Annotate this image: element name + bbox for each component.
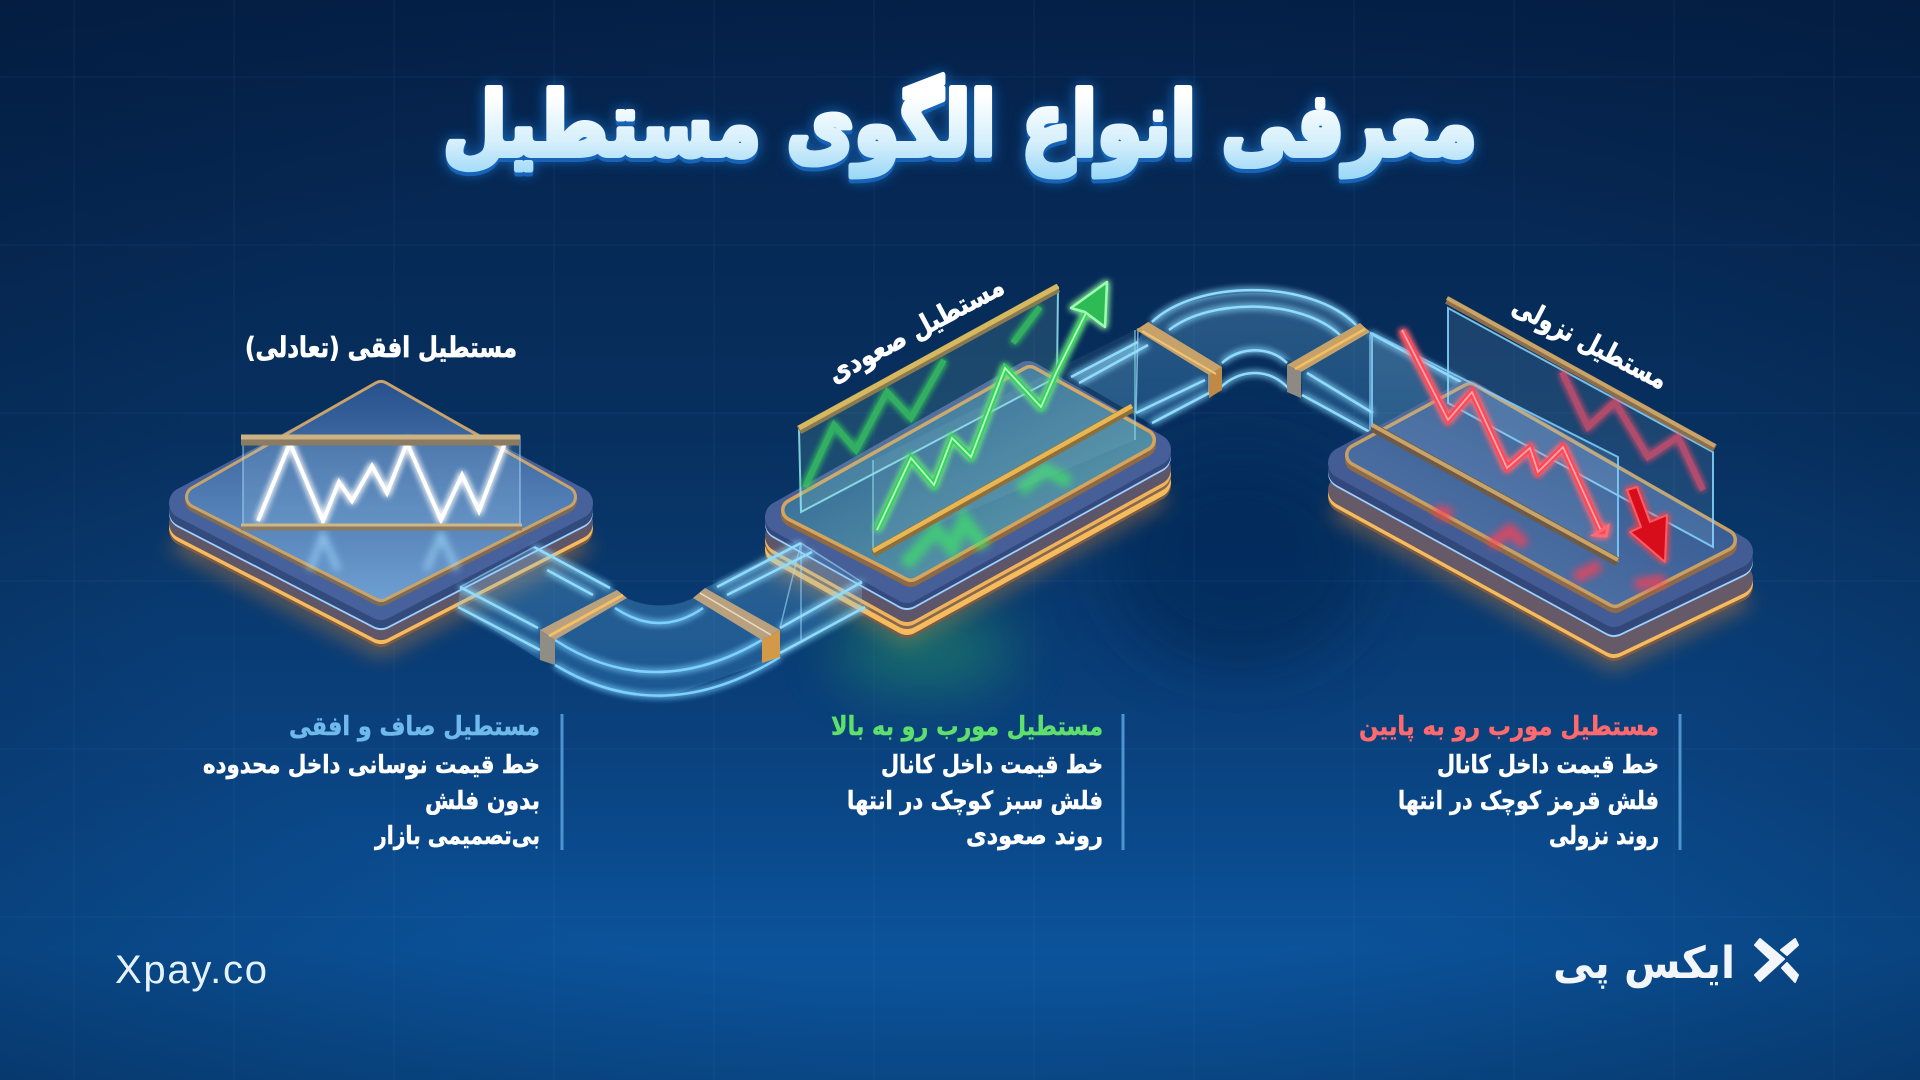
line 2: فلش سبز کوچک در انتها xyxy=(847,786,1103,816)
front support bar xyxy=(873,406,1132,553)
pipe: top arch between rising and falling platforms xyxy=(1071,290,1463,432)
reflection of chart on horizontal plate xyxy=(310,535,457,570)
platform: falling rectangle base xyxy=(1344,394,1737,645)
green rising price line with arrow xyxy=(877,282,1107,530)
reflection of green chart xyxy=(905,470,1070,565)
line 3: روند صعودی xyxy=(966,821,1103,851)
front glass xyxy=(873,330,1135,552)
line 2: فلش قرمز کوچک در انتها xyxy=(1398,786,1659,816)
platform: horizontal rectangle base xyxy=(185,392,577,631)
line 1: خط قیمت داخل کانال xyxy=(881,750,1103,779)
logo xyxy=(1553,938,1798,989)
text block: falling xyxy=(1359,712,1680,851)
connector collar 2 xyxy=(693,588,780,663)
bottom support bar xyxy=(241,525,522,527)
platform: rising rectangle base xyxy=(781,377,1155,622)
panel: horizontal glass with white chart xyxy=(241,436,522,528)
top resistance bar xyxy=(241,437,520,440)
line 3: روند نزولی xyxy=(1549,821,1659,851)
title: معرفی انواع الگوی مستطیل xyxy=(443,74,1477,178)
red arrow xyxy=(1627,487,1667,562)
panel: falling glass with red chart xyxy=(1372,298,1715,562)
front glass xyxy=(1372,333,1618,562)
line 3: بی‌تصمیمی بازار xyxy=(373,821,540,850)
reflection of red chart xyxy=(1435,510,1665,585)
label: horizontal: مستطیل افقی (تعادلی) xyxy=(245,331,517,364)
heading: مستطیل مورب رو به بالا xyxy=(831,712,1103,742)
line 1: خط قیمت داخل کانال xyxy=(1437,750,1659,779)
line 1: خط قیمت نوسانی داخل محدوده xyxy=(203,750,540,780)
website: Xpay.co xyxy=(115,948,267,992)
heading: مستطیل مورب رو به پایین xyxy=(1359,712,1659,742)
panel: rising glass with green chart xyxy=(799,282,1135,553)
label: falling: مستطیل نزولی xyxy=(1507,289,1673,396)
connector collar 1 xyxy=(540,590,627,665)
front support bar xyxy=(1372,425,1618,562)
connector collar A xyxy=(1136,322,1222,398)
text block: rising xyxy=(831,712,1123,851)
bronze and green reflections under platforms xyxy=(185,427,1737,688)
heading: مستطیل صاف و افقی xyxy=(289,712,540,742)
icon: X mark xyxy=(1755,939,1798,982)
back glass xyxy=(799,286,1058,512)
white price line xyxy=(258,443,505,521)
text block: horizontal xyxy=(203,712,562,850)
red falling price line xyxy=(1402,330,1608,536)
title: معرفی انواع الگوی مستطیل xyxy=(443,73,1477,177)
back glass xyxy=(1447,298,1715,547)
connector collar B xyxy=(1287,323,1370,398)
label: rising: مستطیل صعودی xyxy=(822,269,1010,390)
title: معرفی انواع الگوی مستطیل xyxy=(443,77,1477,181)
brand name: ایکس پی xyxy=(1553,938,1735,989)
pipe: U bend between horizontal and rising platforms xyxy=(458,543,865,698)
line 2: بدون فلش xyxy=(425,786,540,816)
